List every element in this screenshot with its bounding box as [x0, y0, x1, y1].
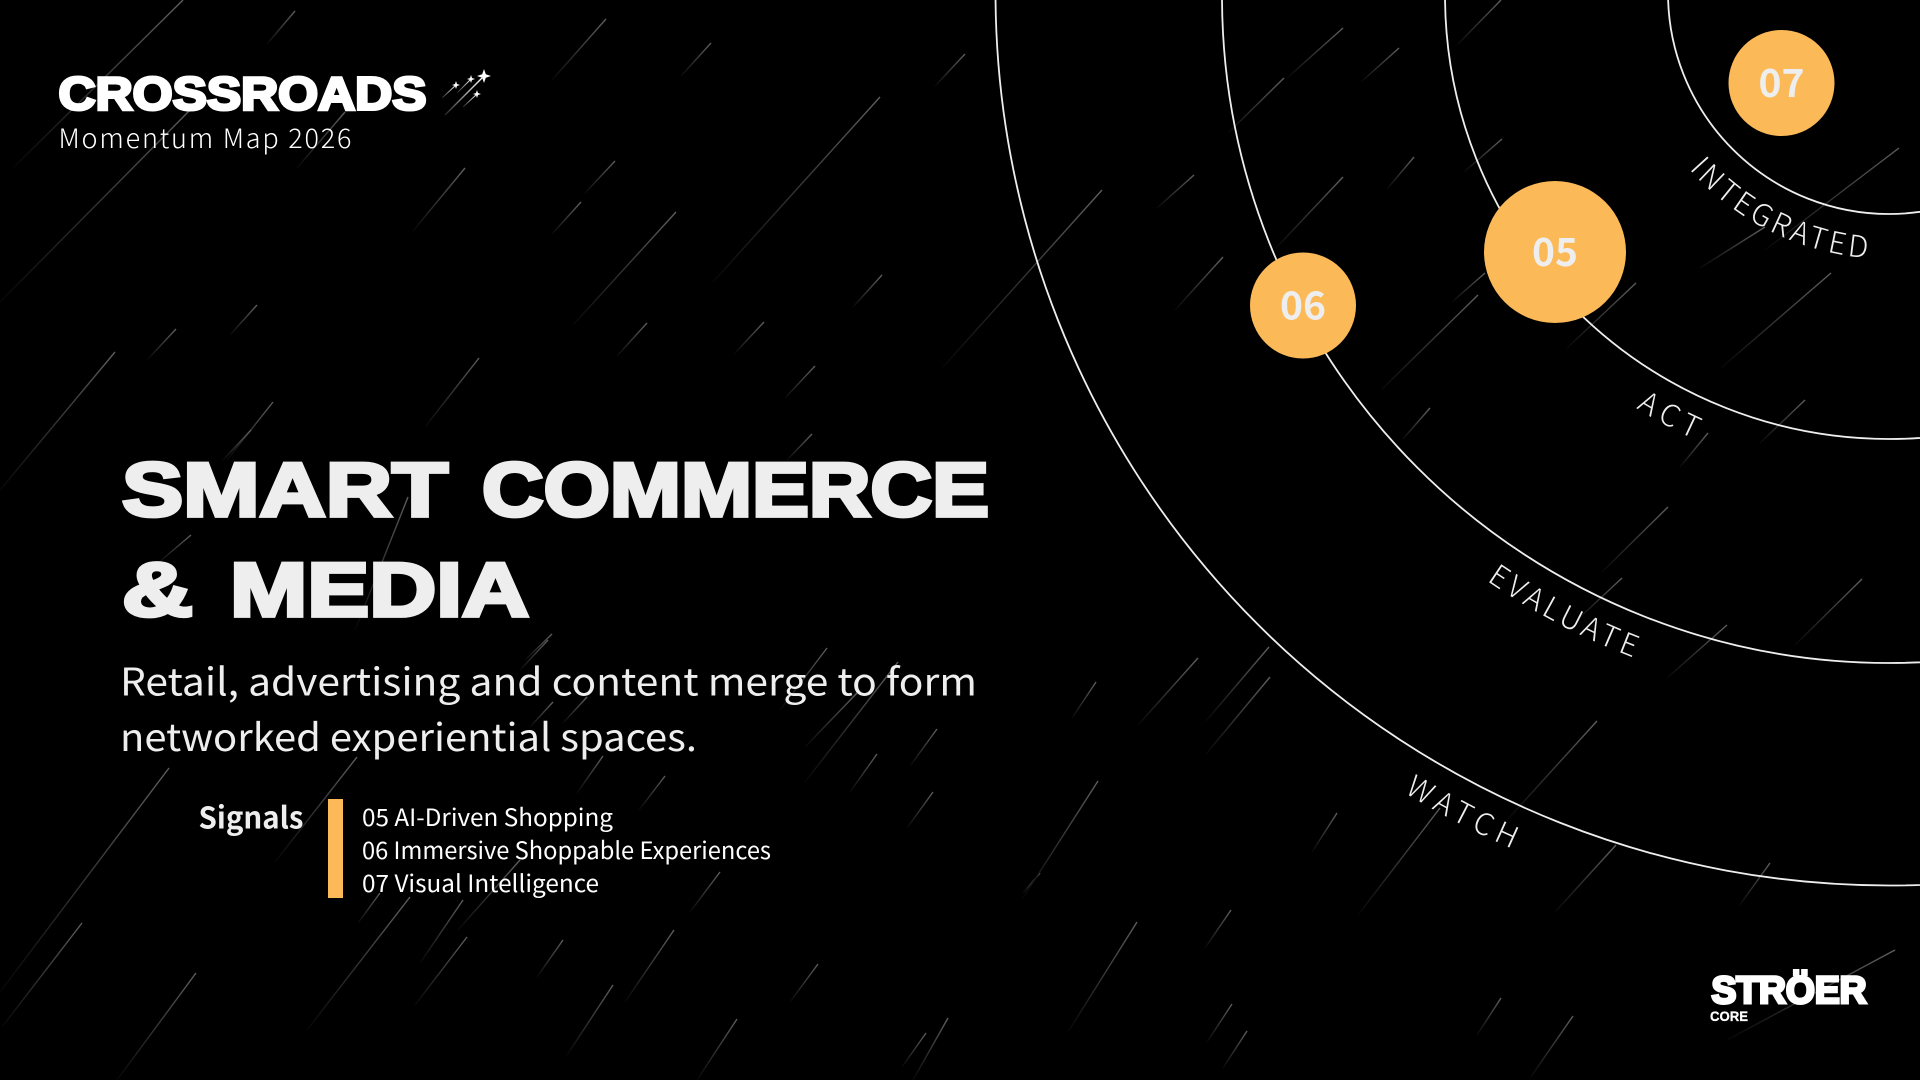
heading: Smart Commerce & Media: MEDIA [230, 548, 529, 633]
ring label: EVALUATE: EVALUATE [1489, 564, 1640, 657]
signals list [362, 798, 771, 899]
marker 06: 06 [1280, 276, 1326, 332]
ring label: INTEGRATED: INTEGRATED [1691, 156, 1867, 257]
heading: Smart Commerce & Media [122, 448, 989, 633]
ring label: WATCH [1409, 774, 1518, 848]
heading: Smart Commerce & Media: SMART [122, 448, 448, 533]
signals accent bar [328, 799, 343, 898]
description text: networked experiential spaces. [120, 707, 697, 762]
marker 07 [1728, 30, 1834, 136]
signals list: 07 Visual Intelligence [362, 864, 599, 899]
ring label: ACT [1636, 393, 1702, 436]
description text: Retail, advertising and content merge to form [120, 652, 977, 706]
signals label: Signals [198, 794, 304, 838]
logo: Stroeer Core: STRÖER [1712, 969, 1866, 1012]
ring label: ACT: ACT [1636, 393, 1702, 436]
signals list: 05 AI-Driven Shopping [362, 798, 613, 833]
icon: shooting stars [442, 69, 491, 115]
heading: Smart Commerce & Media: & [122, 548, 193, 633]
subtitle: Momentum Map 2026: Momentum Map 2026 [58, 117, 352, 156]
signals list: 06 Immersive Shoppable Experiences [362, 831, 771, 866]
logo: CROSSROADS wordmark: CROSSROADS [58, 68, 426, 120]
logo: Stroeer Core: CORE [1710, 1009, 1748, 1024]
description text [120, 652, 977, 762]
marker 06 [1250, 252, 1356, 358]
marker 07: 07 [1758, 53, 1805, 109]
marker 05: 05 [1532, 222, 1578, 278]
ring label: WATCH: WATCH [1409, 774, 1518, 848]
concentric rings [996, 0, 1920, 886]
marker 05 [1484, 181, 1626, 323]
heading: Smart Commerce & Media: COMMERCE [482, 448, 989, 533]
